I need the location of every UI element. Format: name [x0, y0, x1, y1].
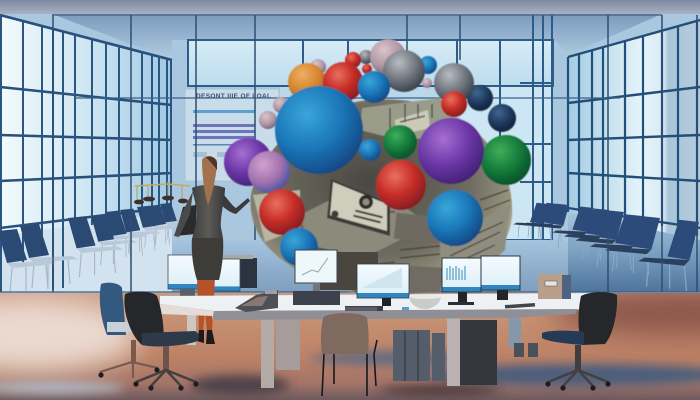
keyboards and mouse [345, 303, 535, 311]
left row of waiting chairs [0, 203, 194, 293]
banknote sphere [250, 98, 512, 296]
skirt [192, 238, 223, 280]
lower back wall [172, 240, 568, 292]
arm [216, 190, 250, 214]
office chair: centre [321, 313, 377, 396]
hair [202, 156, 217, 205]
wall poster: DESONT IIIE OF LOAL [196, 93, 271, 100]
wall poster [185, 89, 279, 181]
glass partition frame [0, 15, 700, 292]
background wall [0, 0, 700, 300]
back wall upper band [52, 14, 662, 60]
balance scales [134, 181, 190, 204]
center front monitor [345, 264, 409, 311]
heels [197, 330, 215, 344]
sculpture: sphere of banknotes and balls [224, 39, 531, 296]
woman figure [174, 156, 250, 344]
left window wall [0, 15, 172, 292]
center left monitor [293, 250, 378, 305]
right window wall [568, 20, 700, 292]
desk telephone [235, 290, 278, 312]
jacket [192, 185, 225, 240]
back windows [188, 15, 553, 244]
office chair: black, left [124, 292, 199, 391]
floor [0, 288, 700, 400]
ceiling [0, 0, 700, 14]
right row of waiting chairs [513, 203, 699, 291]
desk items: box on the right [538, 274, 571, 299]
back balls [310, 59, 326, 75]
right monitors [442, 256, 520, 305]
office chair: black, right [542, 292, 617, 391]
office chair: blue, left [98, 283, 160, 378]
desk top [160, 293, 590, 320]
legs [197, 278, 215, 332]
left desk monitors [160, 255, 257, 302]
handbag [175, 205, 196, 236]
front balls [224, 138, 272, 186]
bowl [409, 295, 441, 309]
large dollar bill [327, 179, 390, 236]
desk legs and under-desk cabinets [187, 315, 538, 388]
